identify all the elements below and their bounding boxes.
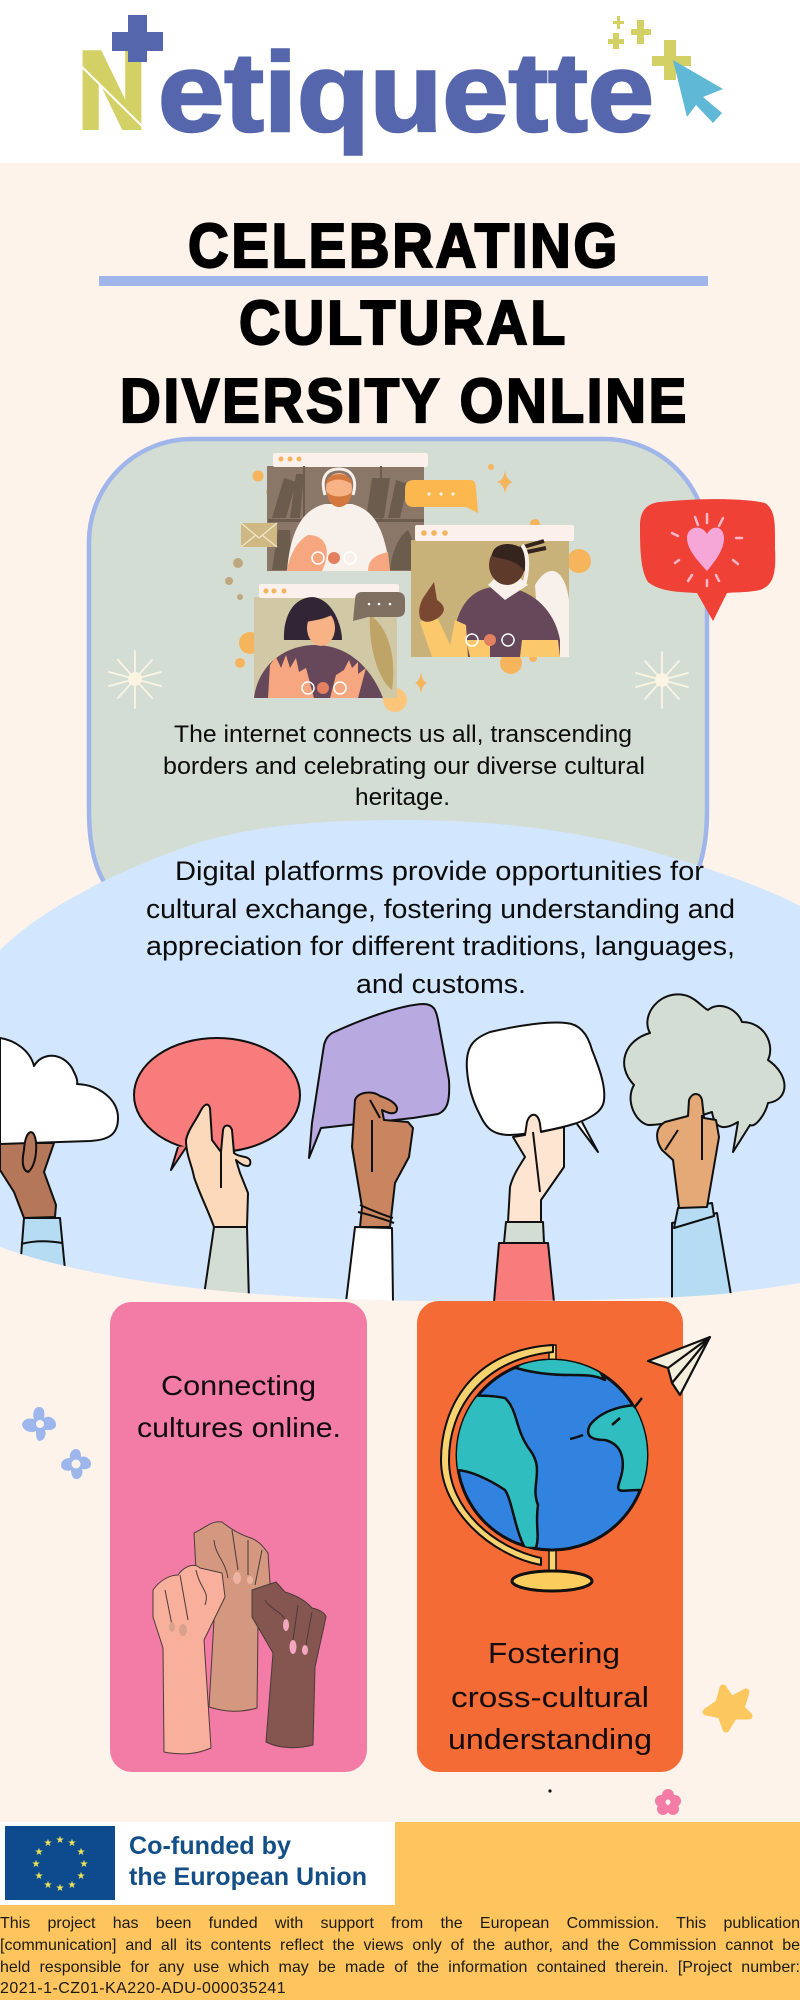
EU flag: ★ bbox=[68, 1838, 77, 1849]
illustration: raised hands with speech bubbles bbox=[0, 994, 784, 1302]
EU flag: ★ bbox=[68, 1880, 77, 1891]
title bbox=[120, 212, 689, 436]
EU text: Co-funded by bbox=[129, 1832, 291, 1860]
disclaimer text: held responsible for any use which may be made of the information contained therein. [Project number: bbox=[0, 1959, 800, 1976]
decorative dots bbox=[225, 464, 591, 712]
disclaimer text bbox=[0, 1915, 800, 1997]
footer band bbox=[0, 1822, 800, 2000]
window: man with headphones bbox=[267, 453, 428, 571]
hand 1 with white cloud bbox=[0, 1038, 118, 1280]
card: fostering understanding bbox=[417, 1301, 710, 1772]
EU flag: ★ bbox=[44, 1880, 53, 1891]
title underline rule bbox=[99, 276, 708, 286]
panel: internet connects bbox=[89, 439, 707, 885]
icon: cursor arrow bbox=[673, 60, 723, 123]
icon: heart speech bubble bbox=[640, 499, 775, 621]
EU flag: ★ bbox=[77, 1871, 86, 1882]
icon: pink flower bbox=[655, 1789, 681, 1815]
text: internet connects bbox=[163, 721, 645, 811]
text: internet connects: borders and celebrating our diverse cultural bbox=[163, 753, 645, 780]
window: person with headphones bbox=[411, 525, 574, 657]
icon: left starburst bbox=[109, 651, 161, 708]
title: CELEBRATING bbox=[188, 212, 620, 281]
card text: fostering: Fostering bbox=[488, 1638, 620, 1670]
illustration: globe bbox=[441, 1345, 660, 1591]
text: digital platforms: Digital platforms provide opportunities for bbox=[175, 856, 704, 886]
text: digital platforms: and customs. bbox=[356, 969, 526, 999]
icon: sparkle plus signs bbox=[608, 16, 691, 80]
text: internet connects: The internet connects us all, transcending bbox=[174, 721, 632, 748]
envelope icon bbox=[241, 523, 277, 547]
EU flag: ★ bbox=[32, 1859, 41, 1870]
header: white logo band bbox=[0, 0, 800, 163]
card text: connecting cultures: cultures online. bbox=[137, 1412, 341, 1443]
text: internet connects: heritage. bbox=[355, 784, 450, 811]
hand 5 with green cloud bubble bbox=[624, 994, 784, 1302]
EU flag: ★ bbox=[44, 1838, 53, 1849]
card: connecting cultures bbox=[110, 1302, 367, 1772]
EU flag: ★ bbox=[35, 1847, 44, 1858]
EU flag: ★ bbox=[77, 1847, 86, 1858]
card text: connecting cultures bbox=[137, 1370, 341, 1443]
window: woman with glasses bbox=[254, 584, 399, 698]
text: digital platforms bbox=[146, 856, 735, 999]
fist: right bbox=[252, 1582, 326, 1748]
EU flag: ★ bbox=[56, 1883, 65, 1894]
title: DIVERSITY ONLINE bbox=[120, 367, 689, 436]
illustration: three raised fists bbox=[153, 1522, 326, 1754]
EU flag: ★ bbox=[56, 1835, 65, 1846]
logo: Netiquette wordmark: N bbox=[78, 30, 146, 152]
panel: digital platforms bbox=[0, 820, 800, 1302]
globe base bbox=[512, 1571, 592, 1591]
EU text: the European Union bbox=[129, 1863, 367, 1891]
fist: middle bbox=[194, 1522, 270, 1711]
title: CULTURAL bbox=[239, 289, 568, 358]
disclaimer text: This project has been funded with support from the European Commission. This publication bbox=[0, 1915, 800, 1932]
logo: Netiquette wordmark: etiquette bbox=[158, 30, 654, 155]
hand 2 with red round bubble bbox=[134, 1038, 300, 1302]
disclaimer text: [communication] and all its contents reflect the views only of the author, and the Commission cannot be bbox=[0, 1937, 800, 1954]
EU flag: ★ bbox=[80, 1859, 89, 1870]
icon: paper plane bbox=[648, 1337, 710, 1395]
card text: fostering: understanding bbox=[448, 1724, 652, 1756]
grey speech bubble bbox=[353, 592, 405, 621]
illustration: video call windows bbox=[225, 453, 591, 712]
text: digital platforms: cultural exchange, fostering understanding and bbox=[146, 894, 735, 924]
EU flag bbox=[5, 1826, 115, 1900]
card text: fostering: cross-cultural bbox=[451, 1682, 649, 1714]
icon: yellow star bbox=[706, 1688, 749, 1729]
card text: fostering bbox=[448, 1638, 652, 1756]
EU co-funded logo box bbox=[0, 1822, 395, 1905]
orange speech bubble bbox=[405, 480, 478, 513]
decorative blue flowers bbox=[22, 1407, 91, 1479]
fist: left bbox=[153, 1565, 225, 1754]
disclaimer text: 2021-1-CZ01-KA220-ADU-000035241 bbox=[0, 1980, 286, 1997]
card text: connecting cultures: Connecting bbox=[161, 1370, 316, 1401]
hand 4 with white bubble bbox=[467, 1022, 604, 1302]
hand 3 with purple bubble bbox=[309, 1004, 449, 1302]
text: digital platforms: appreciation for different traditions, languages, bbox=[146, 931, 735, 961]
small dot bbox=[548, 1789, 552, 1793]
EU flag: ★ bbox=[35, 1871, 44, 1882]
EU text bbox=[129, 1832, 367, 1891]
icon: right starburst bbox=[636, 652, 688, 708]
